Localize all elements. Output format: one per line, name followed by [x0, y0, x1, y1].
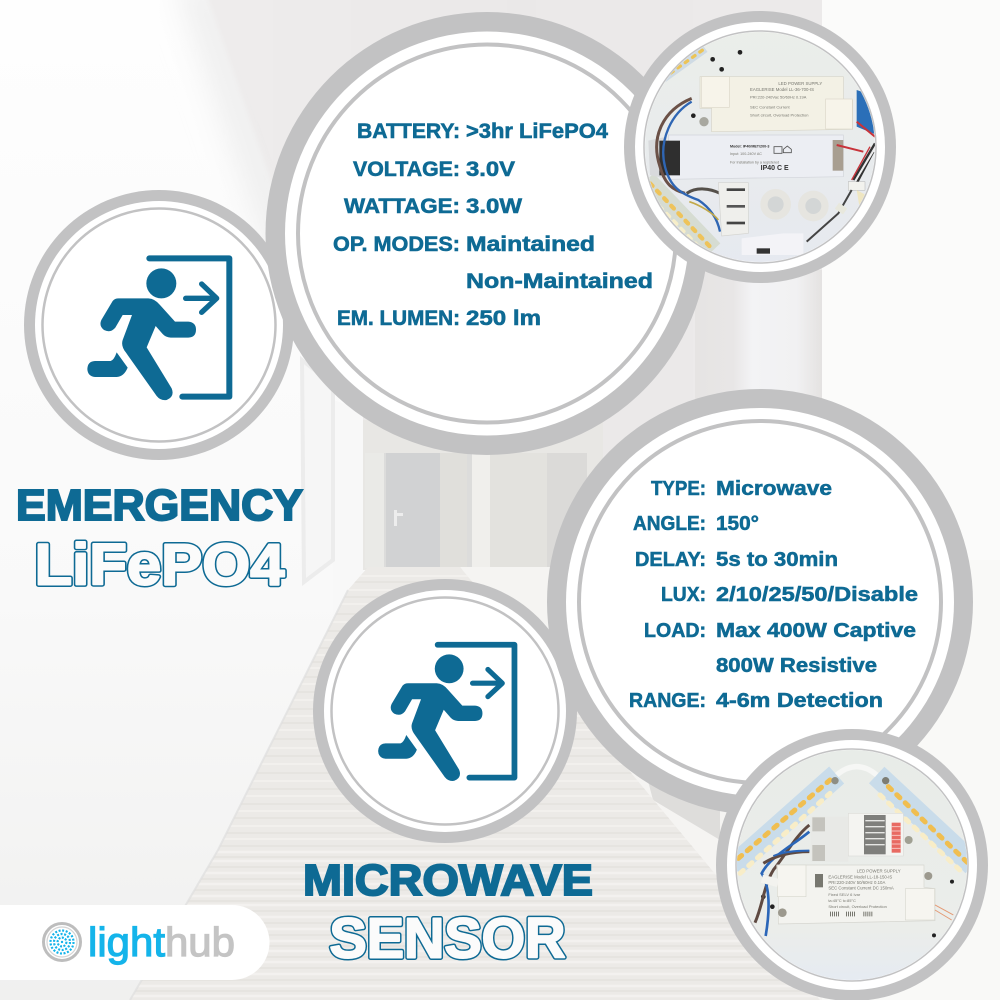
photo: emergency driver module: IP40 C E: [761, 165, 789, 172]
photo: emergency driver module: PRI:220-240Vac 50/60Hz 0.19A: [750, 94, 807, 99]
title: Emergency: EMERGENCY: [16, 482, 303, 530]
sensor values: [716, 478, 918, 712]
spec values: 3.0W: [466, 194, 523, 218]
driver mid: [668, 135, 843, 179]
right lower wall: [460, 567, 1000, 1000]
spec labels: OP. MODES:: [333, 232, 460, 256]
photo: sensor driver module: EAGLERISE Model LL-18-150-IS: [828, 874, 892, 879]
spec labels: [333, 119, 460, 330]
photo: sensor driver module: Fixed SELV 6 Ivar: [828, 892, 861, 897]
sensor values: 4-6m Detection: [716, 690, 883, 712]
photo: sensor driver module: [716, 729, 988, 1000]
photo: emergency driver module: Short circuit, Overload Protection: [750, 113, 808, 118]
spec labels: EM. LUMEN:: [337, 306, 460, 330]
photo: sensor driver module: Short circuit, Overload Protection: [828, 904, 887, 909]
sensor values: 800W Resistive: [716, 655, 877, 677]
title: LiFePO4 outlined: LiFePO4: [34, 532, 284, 598]
photo: sensor driver module: ta:45°C tc:85°C: [828, 898, 856, 903]
logo: lighthub: [0, 905, 270, 980]
spec values: >3hr LiFePO4: [466, 119, 608, 143]
icon: logo ring: [44, 924, 80, 960]
title: Sensor outlined: SENSOR: [330, 906, 566, 970]
wires: [657, 98, 692, 193]
driver top: [700, 77, 853, 132]
sensor labels: LUX:: [661, 584, 706, 606]
photo: sensor driver module: PRI:220-240V 50/60Hz 0.10A: [828, 880, 885, 885]
sensor values: Max 400W Captive: [716, 620, 916, 642]
sensor values: Microwave: [716, 478, 832, 500]
spec values: Maintained: [466, 232, 595, 256]
grommets: [760, 189, 791, 220]
panel: microwave specifications: [547, 389, 973, 815]
switch: [742, 233, 803, 255]
title: Microwave: MICROWAVE: [303, 856, 593, 905]
right wires: [837, 122, 875, 152]
title: Sensor outlined: SENSOR: [330, 906, 566, 970]
sensor labels: ANGLE:: [633, 513, 706, 535]
sensor values: 2/10/25/50/Disable: [716, 584, 918, 606]
wall panel: [302, 360, 333, 582]
icon: running man exit: [87, 258, 229, 400]
sensor labels: [629, 478, 706, 712]
spec labels: VOLTAGE:: [353, 157, 460, 181]
photo: emergency driver module: [624, 11, 896, 283]
logo wordmark: lighthub: [88, 919, 235, 965]
spec values: [466, 119, 653, 330]
icon: running man exit: [378, 645, 514, 781]
photo: sensor driver module: LED POWER SUPPLY: [857, 869, 901, 874]
sensor values: 150°: [716, 513, 759, 535]
photo: emergency driver module: EAGLERISE Model LL-36-700-IS: [750, 87, 814, 92]
panel: emergency specifications: [266, 12, 708, 455]
spec values: 3.0V: [466, 157, 516, 181]
spec values: Non-Maintained: [466, 269, 653, 293]
circle: microwave icon badge: [313, 579, 577, 843]
terminal block: [718, 183, 748, 236]
wires: [755, 825, 809, 923]
sensor labels: TYPE:: [651, 478, 706, 500]
photo: emergency driver module: SEC Constant Current: [750, 104, 791, 109]
spec labels: WATTAGE:: [344, 194, 460, 218]
circle: emergency icon badge: [24, 190, 294, 460]
sensor labels: RANGE:: [629, 690, 706, 712]
sensor values: 5s to 30min: [716, 549, 838, 571]
spec values: 250 lm: [466, 306, 541, 330]
sensor labels: LOAD:: [644, 620, 706, 642]
photo: sensor driver module: SEC Constant Current DC 150mA: [828, 885, 894, 890]
photo: emergency driver module: Input: 100-240V AC: [730, 152, 762, 156]
driver: [777, 865, 935, 924]
photo: emergency driver module: Model: IP40/MET/200-3: [730, 144, 769, 148]
spec labels: BATTERY:: [357, 119, 460, 143]
sensor labels: DELAY:: [635, 549, 706, 571]
photo: emergency driver module: LED POWER SUPPLY: [778, 81, 822, 86]
sensor module: [815, 834, 824, 842]
title: LiFePO4 outlined: LiFePO4: [34, 532, 284, 598]
carpet: [131, 567, 820, 1000]
photo: emergency driver module: For Installation by a registered: [730, 160, 779, 164]
